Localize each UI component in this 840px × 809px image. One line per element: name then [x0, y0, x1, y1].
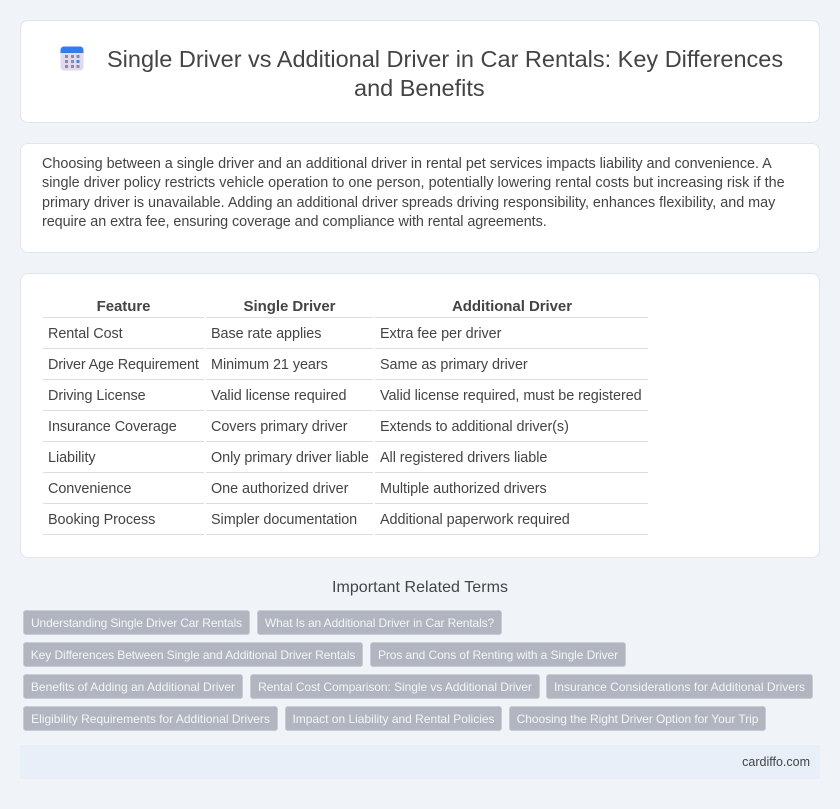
- comparison table: Driver Age Requirement: [48, 357, 199, 373]
- intro text: primary driver is unavailable. Adding an additional driver spreads driving responsibility, enhances flexibility, and may: [42, 195, 775, 211]
- comparison table: Extra fee per driver: [380, 326, 501, 342]
- comparison table: Covers primary driver: [211, 419, 347, 435]
- comparison table: Insurance Coverage: [48, 419, 177, 435]
- footer bar: [20, 745, 820, 779]
- comparison table: Rental Cost: [48, 326, 123, 342]
- icon: calendar: [60, 46, 84, 70]
- comparison table: Feature: [97, 298, 150, 315]
- heading: related terms: Important Related Terms: [332, 579, 508, 596]
- panel: comparison table: [20, 273, 820, 558]
- comparison table: Simpler documentation: [211, 512, 357, 528]
- comparison table: Minimum 21 years: [211, 357, 328, 373]
- comparison table: [43, 298, 648, 535]
- related term tags: Understanding Single Driver Car Rentals: [31, 616, 242, 630]
- comparison table: One authorized driver: [211, 481, 348, 497]
- title: [107, 46, 783, 101]
- comparison table: Driving License: [48, 388, 146, 404]
- panel: title card: [20, 20, 820, 123]
- comparison table: Single Driver: [244, 298, 335, 315]
- related term tags: [23, 610, 813, 731]
- intro text: [42, 156, 785, 230]
- comparison table: Liability: [48, 450, 96, 466]
- comparison table: Booking Process: [48, 512, 155, 528]
- related term tags: Eligibility Requirements for Additional Drivers: [31, 712, 270, 726]
- comparison table: Convenience: [48, 481, 131, 497]
- comparison table: All registered drivers liable: [380, 450, 547, 466]
- related term tags: What Is an Additional Driver in Car Rentals?: [265, 616, 494, 630]
- comparison table: Additional paperwork required: [380, 512, 570, 528]
- related term tags: Benefits of Adding an Additional Driver: [31, 680, 235, 694]
- footer source: cardiffo.com: [742, 755, 810, 769]
- comparison table: Valid license required, must be registered: [380, 388, 642, 404]
- intro text: Choosing between a single driver and an additional driver in rental pet services impacts liability and convenience. A: [42, 156, 772, 172]
- comparison table: Extends to additional driver(s): [380, 419, 569, 435]
- comparison table: Same as primary driver: [380, 357, 528, 373]
- title: Single Driver vs Additional Driver in Car Rentals: Key Differences: [107, 46, 783, 72]
- intro text: require an extra fee, ensuring coverage and compliance with rental agreements.: [42, 214, 547, 230]
- panel: introduction: [20, 143, 820, 253]
- comparison table: Multiple authorized drivers: [380, 481, 547, 497]
- related term tags: Choosing the Right Driver Option for Your Trip: [517, 712, 758, 726]
- related term tags: Rental Cost Comparison: Single vs Additional Driver: [258, 680, 532, 694]
- comparison table: Base rate applies: [211, 326, 321, 342]
- comparison table: Valid license required: [211, 388, 346, 404]
- related term tags: Insurance Considerations for Additional Drivers: [554, 680, 805, 694]
- comparison table: Additional Driver: [452, 298, 572, 315]
- intro text: single driver policy restricts vehicle operation to one person, potentially lowering rental costs but increasing risk if the: [42, 175, 785, 191]
- related term tags: Pros and Cons of Renting with a Single Driver: [378, 648, 618, 662]
- comparison table: Only primary driver liable: [211, 450, 369, 466]
- title: and Benefits: [354, 75, 485, 101]
- related term tags: Impact on Liability and Rental Policies: [292, 712, 495, 726]
- related term tags: Key Differences Between Single and Additional Driver Rentals: [31, 648, 355, 662]
